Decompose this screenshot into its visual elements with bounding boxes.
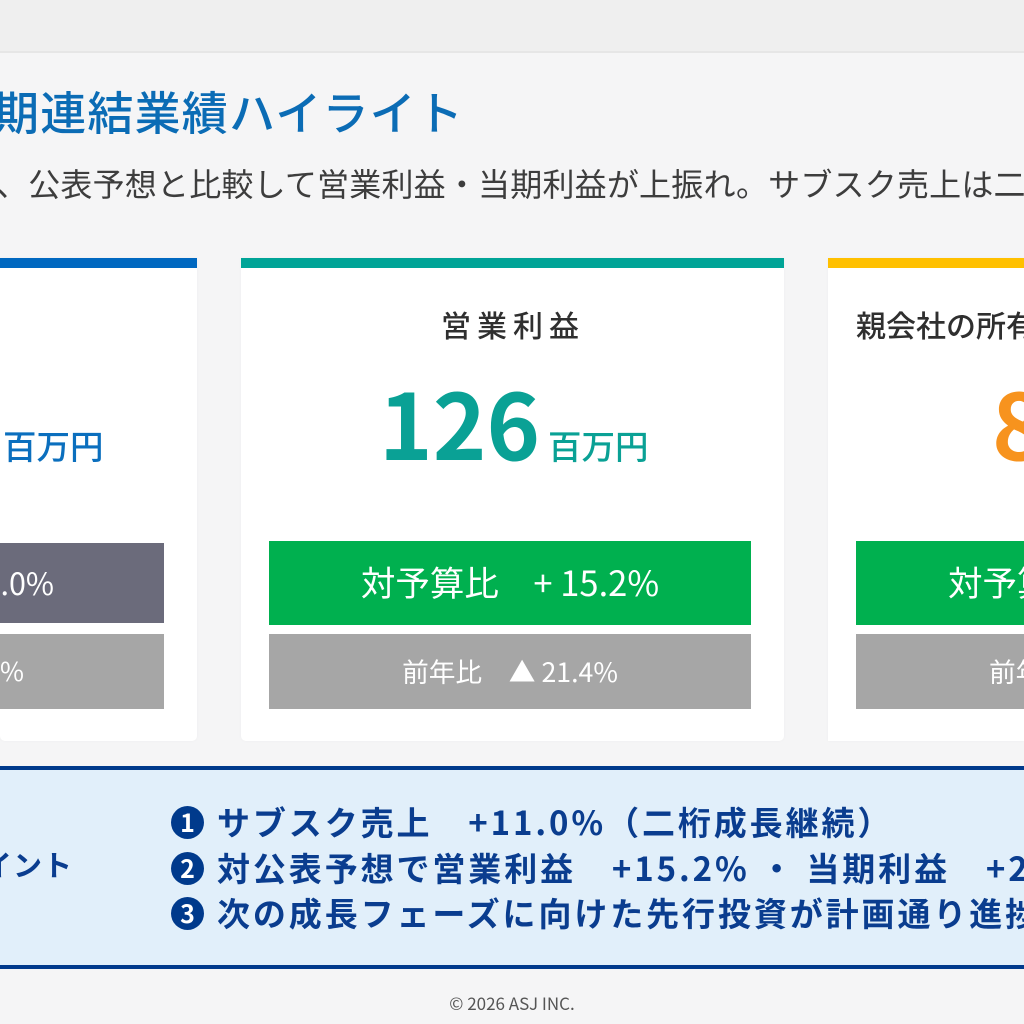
point 3 number xyxy=(171,897,204,930)
panel: net profit card (cropped right) xyxy=(828,258,1024,741)
year-on-year comparison bar xyxy=(269,634,751,709)
point 1 number: 1 xyxy=(180,804,195,840)
panel: key points xyxy=(0,766,1024,969)
point 2 number xyxy=(171,852,204,885)
top header band xyxy=(0,0,1024,53)
year-on-year comparison bar: % xyxy=(0,652,24,689)
operating profit value: 126 xyxy=(379,355,540,487)
year-on-year comparison bar: 前年比 ▲ 21.4% xyxy=(402,651,618,690)
budget comparison bar xyxy=(856,541,1024,625)
year-on-year comparison bar xyxy=(0,634,164,709)
panel: operating profit card xyxy=(241,258,784,741)
card accent bar: blue xyxy=(0,258,197,268)
footer copyright: © 2026 ASJ INC. xyxy=(449,990,575,1015)
budget comparison bar xyxy=(0,543,164,623)
point 3 number: 3 xyxy=(180,895,195,931)
unit label: 百万円 xyxy=(548,420,648,469)
budget comparison bar: 対予算比 + 15.2% xyxy=(361,556,659,606)
budget comparison bar xyxy=(269,541,751,625)
panel: revenue card (cropped left) xyxy=(0,258,197,741)
year-on-year comparison bar xyxy=(856,634,1024,709)
card heading: 営業利益 xyxy=(441,302,585,346)
point 1 number xyxy=(171,806,204,839)
card accent bar: teal xyxy=(241,258,784,268)
card accent bar: amber xyxy=(828,258,1024,268)
unit label: 百万円 xyxy=(3,420,104,469)
budget comparison bar: .0% xyxy=(0,560,54,604)
point 2 number: 2 xyxy=(180,850,195,886)
